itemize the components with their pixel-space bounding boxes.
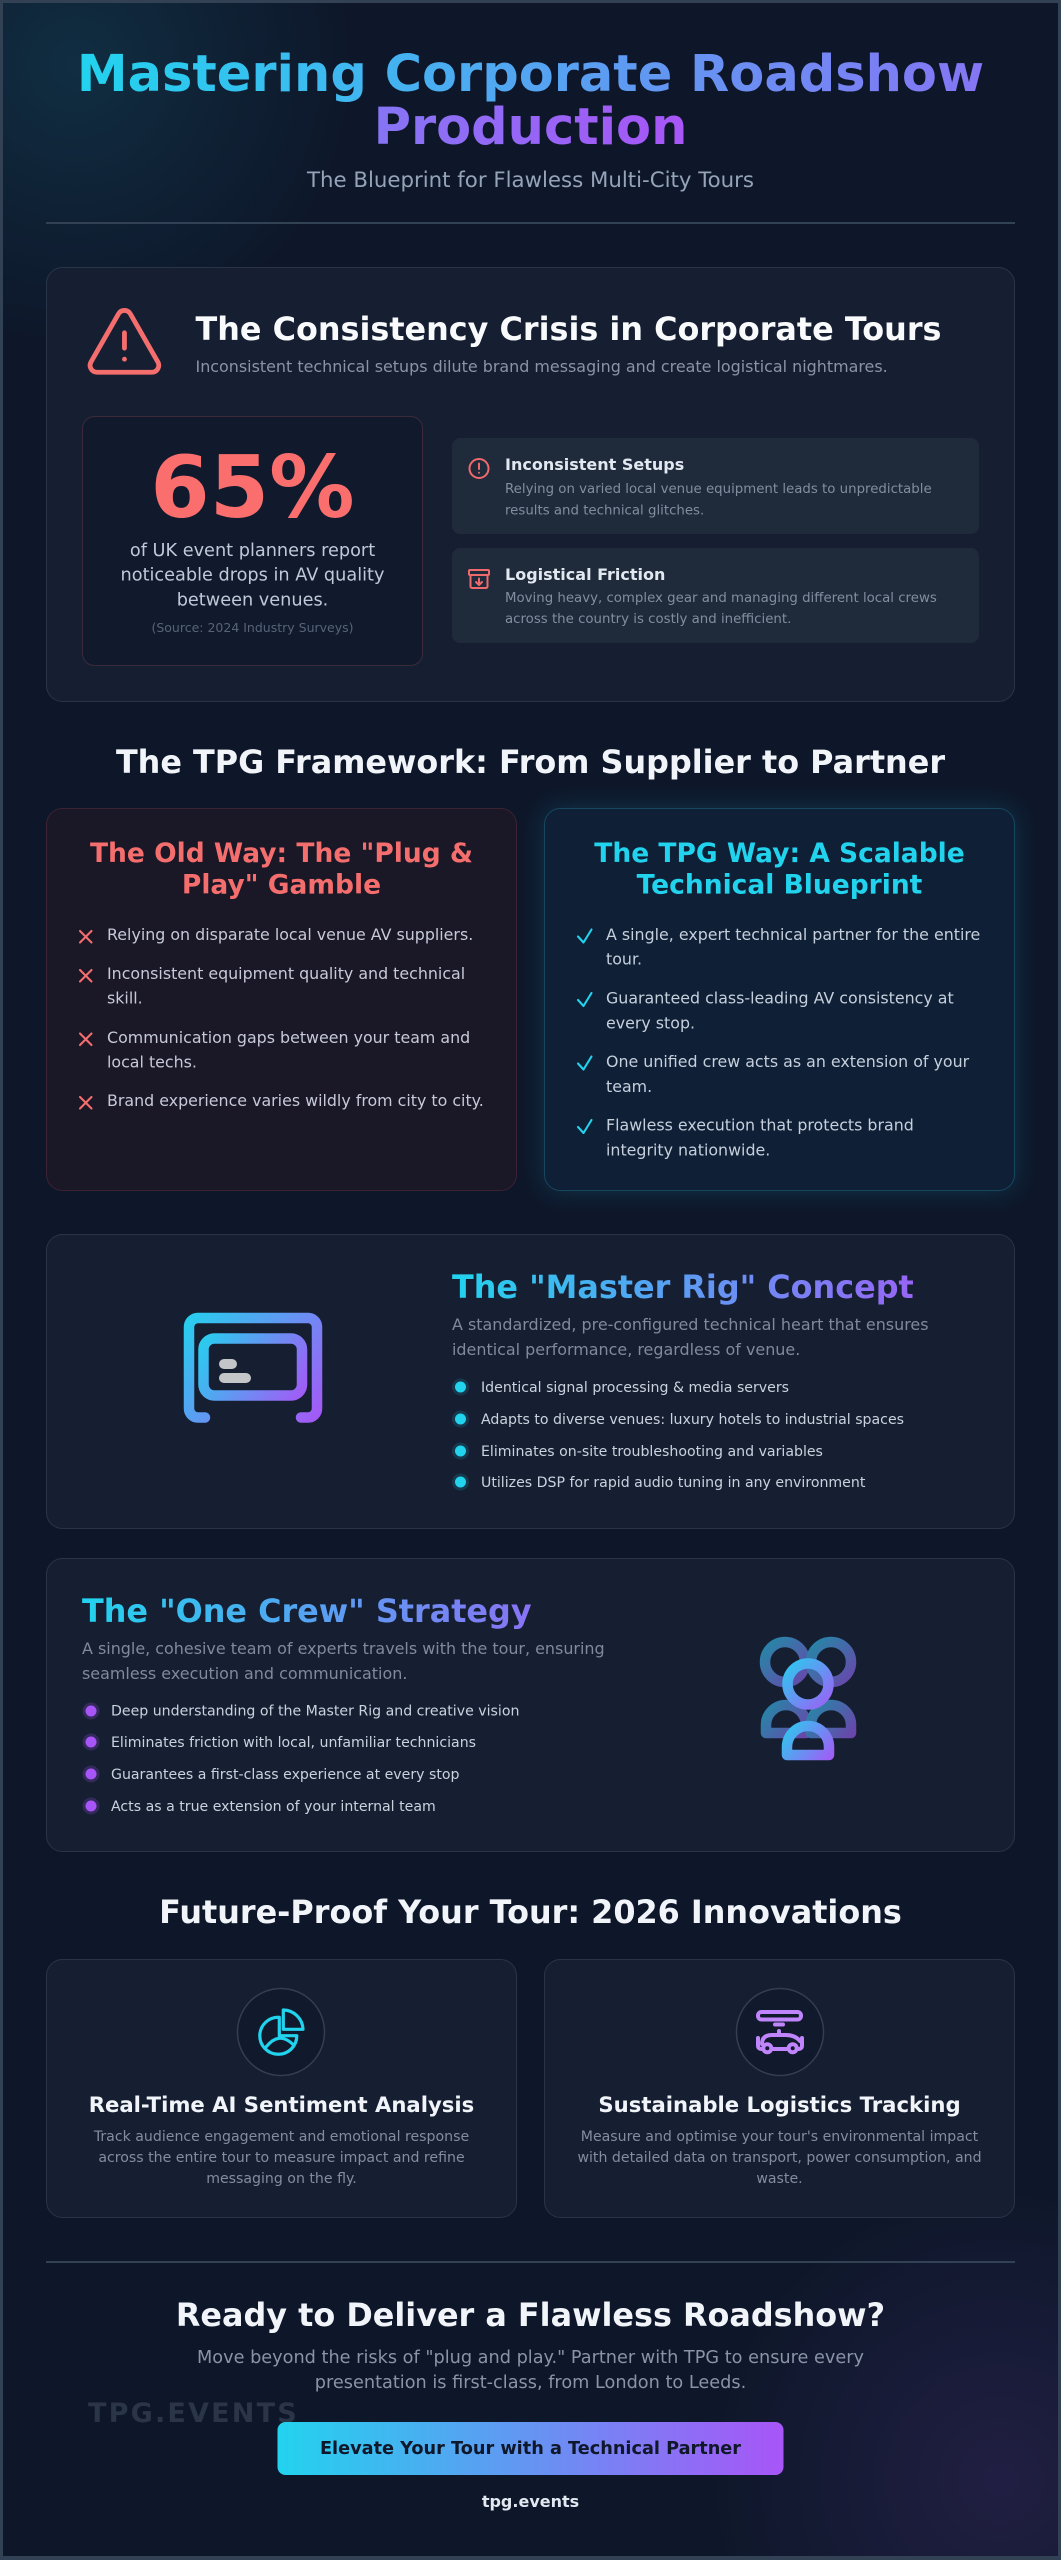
list: TPG way items: every stop. bbox=[606, 1013, 695, 1032]
panel: master rig bbox=[46, 1234, 1014, 1528]
list: TPG way items: team. bbox=[606, 1077, 652, 1096]
card: inconsistent setups: Relying on varied local venue equipment leads to unpredictable bbox=[505, 482, 932, 497]
card: inconsistent setups bbox=[452, 438, 979, 534]
card: inconsistent setups: Inconsistent Setups bbox=[505, 455, 684, 474]
description: Move beyond the risks of "plug and play." Partner with TPG to ensure every bbox=[197, 2348, 864, 2368]
list: TPG way items bbox=[578, 925, 980, 1159]
card: logistical friction: Logistical Friction bbox=[505, 565, 665, 584]
stat description: between venues. bbox=[177, 590, 328, 610]
heading: Sustainable Logistics Tracking bbox=[598, 2092, 961, 2117]
card: sustainable logistics bbox=[544, 1960, 1014, 2218]
icon: master rig bbox=[189, 1318, 317, 1418]
list: TPG way items: Guaranteed class-leading AV consistency at bbox=[606, 988, 954, 1008]
title bbox=[77, 45, 984, 157]
icon: crew bbox=[765, 1642, 851, 1755]
list: old way items bbox=[80, 925, 484, 1110]
description: across the entire tour to measure impact and refine bbox=[98, 2150, 465, 2166]
list: master rig items bbox=[452, 1378, 904, 1491]
heading: Ready to Deliver a Flawless Roadshow? bbox=[176, 2296, 885, 2334]
stat description: of UK event planners report bbox=[130, 541, 375, 561]
heading: Technical Blueprint bbox=[637, 870, 923, 901]
list: TPG way items: tour. bbox=[606, 950, 642, 969]
title: Production bbox=[374, 98, 687, 157]
list: TPG way items: Flawless execution that protects brand bbox=[606, 1116, 914, 1134]
heading: Real-Time AI Sentiment Analysis bbox=[89, 2092, 474, 2117]
heading: Play" Gamble bbox=[182, 870, 381, 901]
list: master rig items: Eliminates on-site troubleshooting and variables bbox=[481, 1444, 823, 1460]
card: logistical friction bbox=[452, 548, 979, 643]
description: identical performance, regardless of venue. bbox=[452, 1340, 800, 1359]
description: seamless execution and communication. bbox=[82, 1664, 407, 1683]
heading: framework: The TPG Framework: From Supplier to Partner bbox=[116, 743, 945, 781]
list: old way items: Brand experience varies wildly from city to city. bbox=[107, 1091, 484, 1110]
description: presentation is first-class, from London to Leeds. bbox=[315, 2373, 746, 2393]
list: one crew items: Guarantees a first-class experience at every stop bbox=[111, 1767, 460, 1783]
list: old way items: local techs. bbox=[107, 1053, 197, 1072]
list: one crew items: Acts as a true extension of your internal team bbox=[111, 1799, 436, 1815]
heading: The "One Crew" Strategy bbox=[82, 1592, 532, 1630]
description: waste. bbox=[756, 2171, 803, 2187]
title: Mastering Corporate Roadshow bbox=[77, 45, 984, 104]
panel: one crew bbox=[46, 1558, 1014, 1852]
list: TPG way items: A single, expert technical partner for the entire bbox=[606, 925, 980, 944]
panel: consistency crisis bbox=[46, 268, 1014, 702]
icon: alert circle bbox=[470, 459, 488, 478]
card: logistical friction: across the country is costly and inefficient. bbox=[505, 612, 791, 627]
list: old way items: Inconsistent equipment quality and technical bbox=[107, 964, 465, 983]
card: logistical friction: Moving heavy, complex gear and managing different local crews bbox=[505, 591, 937, 606]
button bbox=[278, 2422, 784, 2475]
heading: The TPG Way: A Scalable bbox=[594, 838, 965, 869]
stat description: noticeable drops in AV quality bbox=[121, 566, 384, 586]
heading: innovations: Future-Proof Your Tour: 2026 Innovations bbox=[159, 1893, 902, 1931]
heading: The Old Way: The "Plug & bbox=[90, 838, 473, 869]
call to action bbox=[88, 2296, 885, 2511]
stat number: 65% bbox=[150, 439, 355, 538]
list: old way items: skill. bbox=[107, 989, 143, 1008]
list: old way items: Relying on disparate local venue AV suppliers. bbox=[107, 925, 473, 944]
description: messaging on the fly. bbox=[206, 2171, 357, 2187]
panel: the old way bbox=[46, 808, 516, 1190]
header bbox=[77, 45, 984, 193]
icon: warning triangle bbox=[90, 310, 159, 372]
list: old way items: Communication gaps between your team and bbox=[107, 1028, 470, 1047]
heading: The "Master Rig" Concept bbox=[452, 1268, 914, 1306]
description: Track audience engagement and emotional response bbox=[93, 2129, 469, 2145]
description: A standardized, pre-configured technical heart that ensures bbox=[452, 1315, 929, 1334]
list: master rig items: Utilizes DSP for rapid audio tuning in any environment bbox=[481, 1475, 866, 1491]
description: Measure and optimise your tour's environmental impact bbox=[581, 2129, 979, 2145]
list: one crew items: Deep understanding of the Master Rig and creative vision bbox=[111, 1704, 519, 1720]
website: tpg.events bbox=[482, 2492, 579, 2511]
list: master rig items: Identical signal processing & media servers bbox=[481, 1380, 789, 1396]
card: inconsistent setups: results and technical glitches. bbox=[505, 503, 704, 518]
heading: The Consistency Crisis in Corporate Tours bbox=[196, 310, 942, 348]
source: (Source: 2024 Industry Surveys) bbox=[151, 620, 354, 635]
icon: vehicle bbox=[736, 1988, 824, 2076]
stat box: 65% bbox=[82, 416, 422, 666]
icon: pie chart bbox=[238, 1988, 324, 2076]
list: one crew items: Eliminates friction with local, unfamiliar technicians bbox=[111, 1735, 476, 1751]
icon: archive box bbox=[469, 570, 489, 588]
description: A single, cohesive team of experts travels with the tour, ensuring bbox=[82, 1639, 605, 1658]
subtitle: The Blueprint for Flawless Multi-City Tours bbox=[306, 168, 754, 193]
list: TPG way items: One unified crew acts as an extension of your bbox=[606, 1052, 970, 1071]
button: Elevate Your Tour with a Technical Partner bbox=[320, 2439, 741, 2459]
subheading: Inconsistent technical setups dilute brand messaging and create logistical nightmares. bbox=[196, 357, 888, 376]
list: one crew items bbox=[82, 1702, 519, 1815]
watermark: TPG.EVENTS bbox=[88, 2398, 299, 2429]
list: TPG way items: integrity nationwide. bbox=[606, 1140, 770, 1159]
description: with detailed data on transport, power consumption, and bbox=[577, 2150, 982, 2166]
list: master rig items: Adapts to diverse venues: luxury hotels to industrial spaces bbox=[481, 1412, 904, 1428]
card: AI sentiment bbox=[46, 1960, 516, 2218]
panel: the TPG way bbox=[544, 808, 1015, 1191]
